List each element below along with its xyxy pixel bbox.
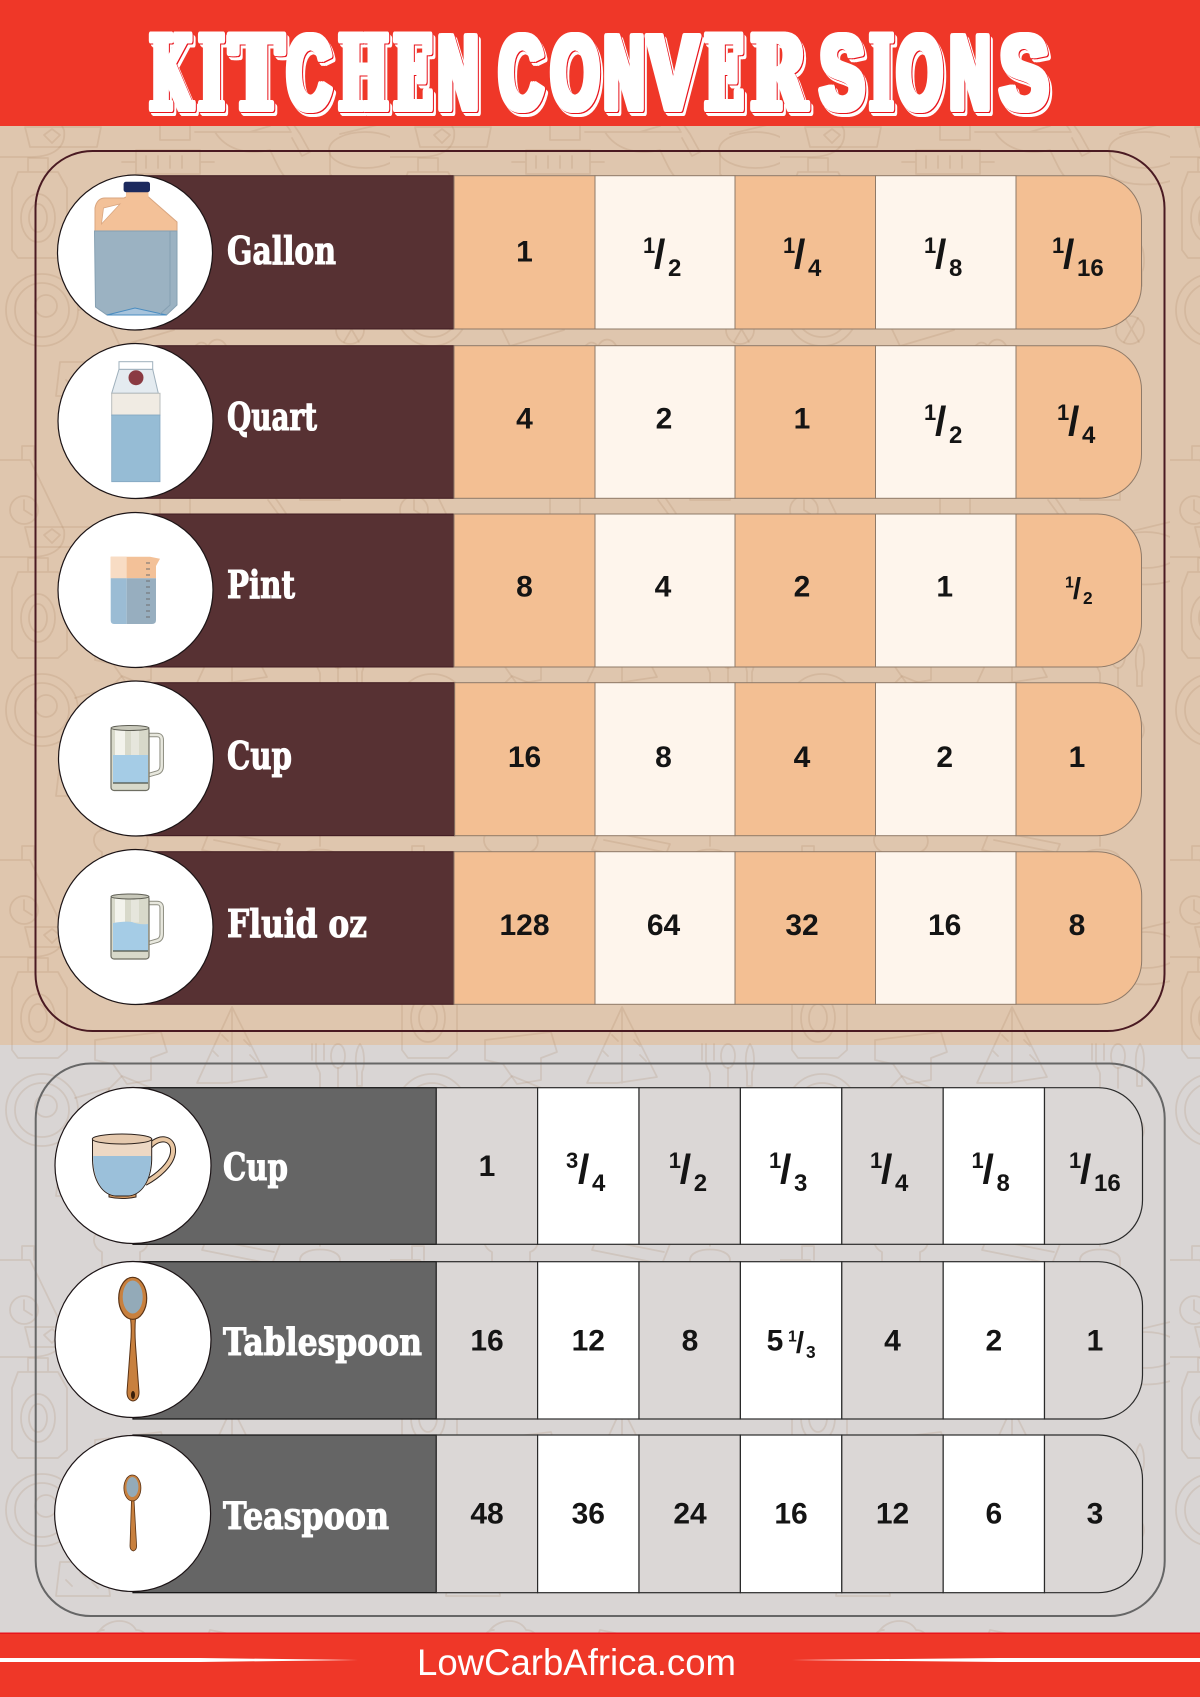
title: E (394, 14, 432, 134)
values: 1 (972, 1148, 984, 1173)
value cells (454, 852, 1142, 1004)
values: / (794, 231, 805, 277)
values: / (1068, 398, 1079, 444)
values: / (654, 231, 665, 277)
row: Tablespoon (55, 1262, 1142, 1419)
icon: pint beaker (58, 512, 213, 668)
values: 1 (788, 1328, 797, 1345)
footer banner (0, 1632, 1200, 1697)
values: 4 (655, 570, 672, 604)
title: O (897, 14, 942, 132)
values: 3 (806, 1342, 816, 1362)
footer website text: LowCarbAfrica.com (417, 1642, 736, 1683)
values: / (578, 1146, 589, 1192)
values: 1 (669, 1148, 681, 1173)
title: C (499, 14, 543, 132)
row: Pint (58, 512, 1142, 668)
label: Tablespoon: Tablespoon (223, 1320, 422, 1364)
values: 1 (769, 1148, 781, 1173)
values: 1 (1069, 741, 1085, 774)
values: 1 (1057, 400, 1069, 425)
value cells (454, 176, 1142, 329)
values: 1 (643, 233, 655, 258)
values: 2 (694, 1170, 707, 1197)
label band (135, 346, 454, 498)
title: I (870, 14, 893, 134)
label band (133, 1435, 436, 1593)
values: 6 (985, 1498, 1002, 1530)
row: Quart (58, 344, 1142, 498)
title: H (339, 14, 388, 134)
values: 24 (673, 1498, 707, 1530)
icon: gallon jug (58, 175, 212, 330)
values: 5 (767, 1324, 783, 1358)
title: T (230, 14, 283, 134)
values: 4 (592, 1170, 606, 1197)
values: 2 (1083, 588, 1093, 608)
panel: dry measures (36, 1064, 1165, 1616)
title: V (648, 14, 698, 132)
values: / (1080, 1146, 1091, 1192)
title: E (705, 14, 743, 134)
values: 2 (936, 741, 953, 774)
label band (135, 176, 454, 329)
row: Fluid oz (58, 850, 1142, 1004)
title: C (287, 14, 331, 132)
values: / (935, 231, 946, 277)
values: 1 (1065, 574, 1074, 591)
values: 12 (876, 1498, 909, 1530)
values: 8 (996, 1170, 1010, 1197)
icon: glass mug (58, 681, 214, 836)
values: 1 (1087, 1324, 1103, 1358)
icon: tablespoon (55, 1262, 211, 1418)
values: 1 (1069, 1148, 1081, 1173)
values: 2 (794, 570, 810, 604)
values: 8 (1069, 909, 1085, 942)
value cells (436, 1088, 1142, 1244)
values (516, 398, 1096, 449)
values: 36 (572, 1498, 605, 1530)
values: / (982, 1146, 994, 1192)
label: Teaspoon: Teaspoon (223, 1494, 389, 1538)
values: / (935, 398, 946, 444)
values: 16 (928, 909, 961, 942)
footer divider left (0, 1658, 358, 1662)
icon: tea cup (55, 1088, 211, 1244)
value cells (455, 683, 1142, 836)
label band (135, 852, 454, 1004)
label: Cup: Cup (227, 733, 292, 778)
values: 16 (508, 741, 541, 774)
label: Pint: Pint (227, 562, 295, 607)
values: 1 (1052, 233, 1064, 258)
label band (133, 1088, 436, 1244)
values (516, 231, 1104, 282)
row: Cup (dry) (55, 1088, 1142, 1244)
values: 1 (870, 1148, 882, 1173)
values: 16 (1094, 1170, 1121, 1197)
values: 8 (949, 255, 962, 282)
header banner (0, 0, 1200, 134)
value cells (454, 514, 1142, 667)
label band (135, 683, 455, 836)
values: 2 (656, 402, 672, 436)
values: 16 (774, 1498, 808, 1530)
values: 4 (884, 1324, 901, 1358)
value cells (436, 1262, 1142, 1419)
values: 16 (470, 1324, 504, 1358)
footer divider right (792, 1658, 1200, 1662)
values: 2 (668, 255, 681, 282)
icon: teaspoon (55, 1436, 211, 1592)
title: S (820, 14, 864, 132)
title: N (604, 14, 644, 132)
values: 1 (936, 570, 953, 604)
values: 1 (516, 236, 533, 268)
values: 1 (924, 400, 936, 425)
values: 128 (499, 909, 550, 942)
title: O (551, 14, 599, 132)
title: N (438, 14, 478, 132)
values (470, 1324, 1103, 1362)
values: 3 (566, 1148, 578, 1173)
title: I (199, 14, 224, 134)
background: tan upper section (0, 126, 1200, 1045)
values: / (780, 1146, 791, 1192)
label: Fluid oz: Fluid oz (227, 901, 367, 946)
values: 4 (895, 1170, 909, 1197)
values: 16 (1077, 255, 1104, 282)
values: 8 (682, 1324, 698, 1358)
row: Gallon (58, 175, 1142, 330)
values: 3 (1087, 1498, 1103, 1530)
panel: liquid measures (36, 151, 1164, 1031)
title: K (150, 14, 193, 134)
values: 2 (985, 1324, 1002, 1358)
value cells (454, 346, 1142, 498)
label: Quart: Quart (227, 394, 317, 439)
label: Cup: Cup (223, 1145, 288, 1189)
values (516, 570, 1093, 608)
values: / (881, 1146, 892, 1192)
values: 32 (785, 909, 819, 942)
values: 1 (924, 233, 936, 258)
values: 64 (647, 909, 680, 942)
background: grey lower section (0, 1045, 1200, 1633)
values: / (680, 1146, 691, 1192)
values: 48 (470, 1498, 504, 1530)
values: / (1063, 231, 1074, 277)
values: 1 (479, 1150, 495, 1183)
values: 8 (516, 570, 533, 604)
title: N (950, 14, 990, 132)
values: 1 (794, 402, 810, 436)
row: Cup (58, 681, 1142, 836)
values: 2 (949, 422, 962, 449)
title: R (751, 14, 807, 134)
label: Gallon: Gallon (227, 228, 336, 273)
title: S (1000, 14, 1048, 132)
values: 4 (1082, 422, 1096, 449)
values: 4 (808, 255, 822, 282)
values (508, 741, 1085, 774)
values: 4 (516, 402, 533, 436)
label band (135, 514, 454, 667)
values: 1 (783, 233, 795, 258)
icon: glass mug with water (58, 850, 213, 1004)
values: / (1073, 572, 1081, 605)
values (479, 1146, 1121, 1197)
icon: quart carton (58, 344, 213, 498)
values: / (796, 1326, 804, 1359)
values (470, 1498, 1103, 1530)
values: 3 (794, 1170, 807, 1197)
value cells (436, 1435, 1142, 1593)
values: 8 (655, 741, 672, 774)
values: 12 (572, 1324, 605, 1358)
values (499, 909, 1085, 942)
row: Teaspoon (55, 1435, 1143, 1593)
label band (133, 1262, 436, 1419)
values: 4 (794, 741, 811, 774)
